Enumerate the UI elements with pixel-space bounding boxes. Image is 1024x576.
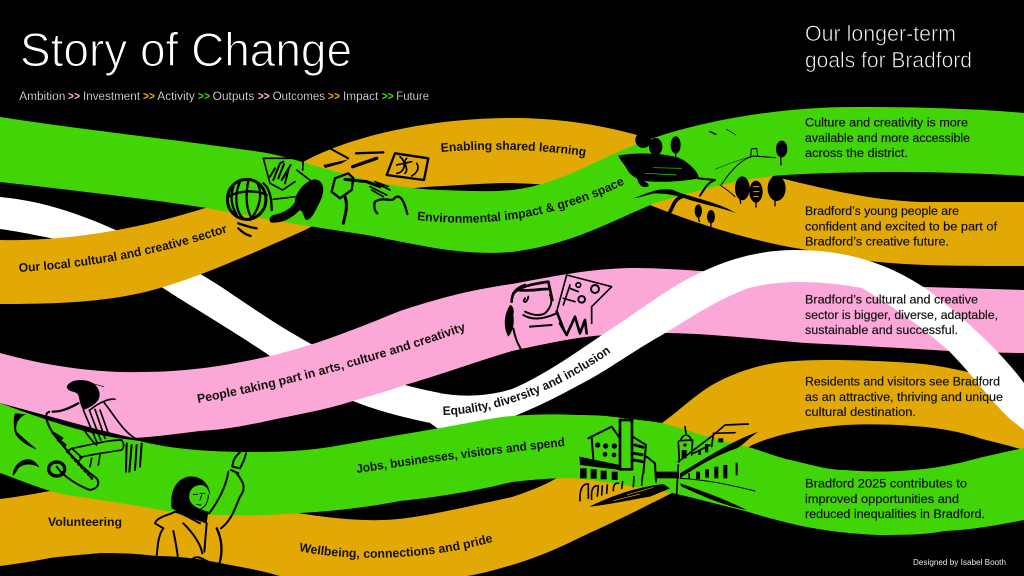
goal: destination: cultural destination. <box>805 405 916 419</box>
subtitle: process chain: >> <box>198 91 210 103</box>
ribbon: white equality ribbon, left section <box>0 197 440 425</box>
goal: creative sector: sector is bigger, diverse, adaptable, <box>805 308 998 322</box>
illustration: saxophone player <box>13 380 142 490</box>
ribbon: pink <box>0 268 1024 438</box>
subtitle: process chain: >> <box>328 91 340 103</box>
subtitle: process chain: Activity <box>157 91 195 103</box>
subtitle: process chain: Outputs <box>213 91 255 103</box>
goal: culture availability: across the district. <box>805 146 908 160</box>
credit: Designed by Isabel Booth <box>913 557 1006 567</box>
goal: young people: Bradford’s young people are <box>805 204 959 218</box>
subtitle: process chain <box>19 91 429 103</box>
goal: opportunities: Bradford 2025 contributes to <box>805 476 967 490</box>
subtitle: process chain: >> <box>68 91 80 103</box>
goal: destination: Residents and visitors see Bradford <box>805 374 1000 388</box>
illustration: person holding up a drawing <box>505 275 612 353</box>
goal: creative sector: sustainable and successful. <box>805 323 958 337</box>
subtitle: process chain: Impact <box>343 91 379 103</box>
heading: longer-term goals: Our longer-term <box>805 21 956 46</box>
goal: young people: Bradford’s creative future. <box>805 234 949 248</box>
ribbon label: shared learning: Enabling shared learning <box>441 140 586 158</box>
ribbon label: volunteering: Volunteering <box>48 515 122 529</box>
goal: creative sector: Bradford’s cultural and creative <box>805 292 978 306</box>
ribbon label: wellbeing: Wellbeing, connections and pride <box>300 535 492 560</box>
ribbon: amber lower <box>0 360 1024 576</box>
goal: culture availability: available and more accessible <box>805 131 970 145</box>
goal: young people: confident and excited to be part of <box>805 220 998 234</box>
ribbon label: local sector: Our local cultural and creative sector <box>19 226 226 272</box>
ribbon: green lower <box>0 403 1024 535</box>
goal: young people <box>805 204 998 248</box>
goal: culture availability <box>805 116 970 160</box>
goal: destination <box>805 374 1003 419</box>
subtitle: process chain: >> <box>382 91 394 103</box>
ribbon: white equality ribbon, right section <box>430 250 1024 430</box>
subtitle: process chain: >> <box>143 91 155 103</box>
goal: opportunities: improved opportunities and <box>805 492 959 506</box>
illustration: Bradford street buildings <box>579 420 758 510</box>
title: Story of Change <box>20 23 352 76</box>
ribbon label: taking part: People taking part in arts, culture and creativity <box>197 324 464 403</box>
subtitle: process chain: >> <box>258 91 270 103</box>
goal: creative sector <box>805 292 998 337</box>
heading: longer-term goals <box>805 21 972 72</box>
goal: opportunities <box>805 476 985 521</box>
ribbon label: jobs: Jobs, businesses, visitors and spend <box>356 437 564 473</box>
ribbon: amber upper <box>0 118 1024 304</box>
goal: culture availability: Culture and creativity is more <box>805 116 968 130</box>
ribbon: green upper <box>0 107 1024 253</box>
ribbon label: equality: Equality, diversity and inclusion <box>443 348 610 417</box>
illustration: volunteer waving <box>155 452 246 565</box>
illustration: people making art on a table <box>227 148 428 236</box>
subtitle: process chain: Outcomes <box>273 91 325 103</box>
illustration: landscape with hill and trees <box>618 129 787 227</box>
goal: destination: as an attractive, thriving and unique <box>805 390 1003 404</box>
goal: opportunities: reduced inequalities in Bradford. <box>805 507 985 521</box>
subtitle: process chain: Investment <box>83 91 141 103</box>
heading: longer-term goals: goals for Bradford <box>805 48 972 72</box>
subtitle: process chain: Future <box>396 91 429 103</box>
ribbon label: environmental impact: Environmental impact & green space <box>418 179 624 223</box>
subtitle: process chain: Ambition <box>19 91 65 103</box>
